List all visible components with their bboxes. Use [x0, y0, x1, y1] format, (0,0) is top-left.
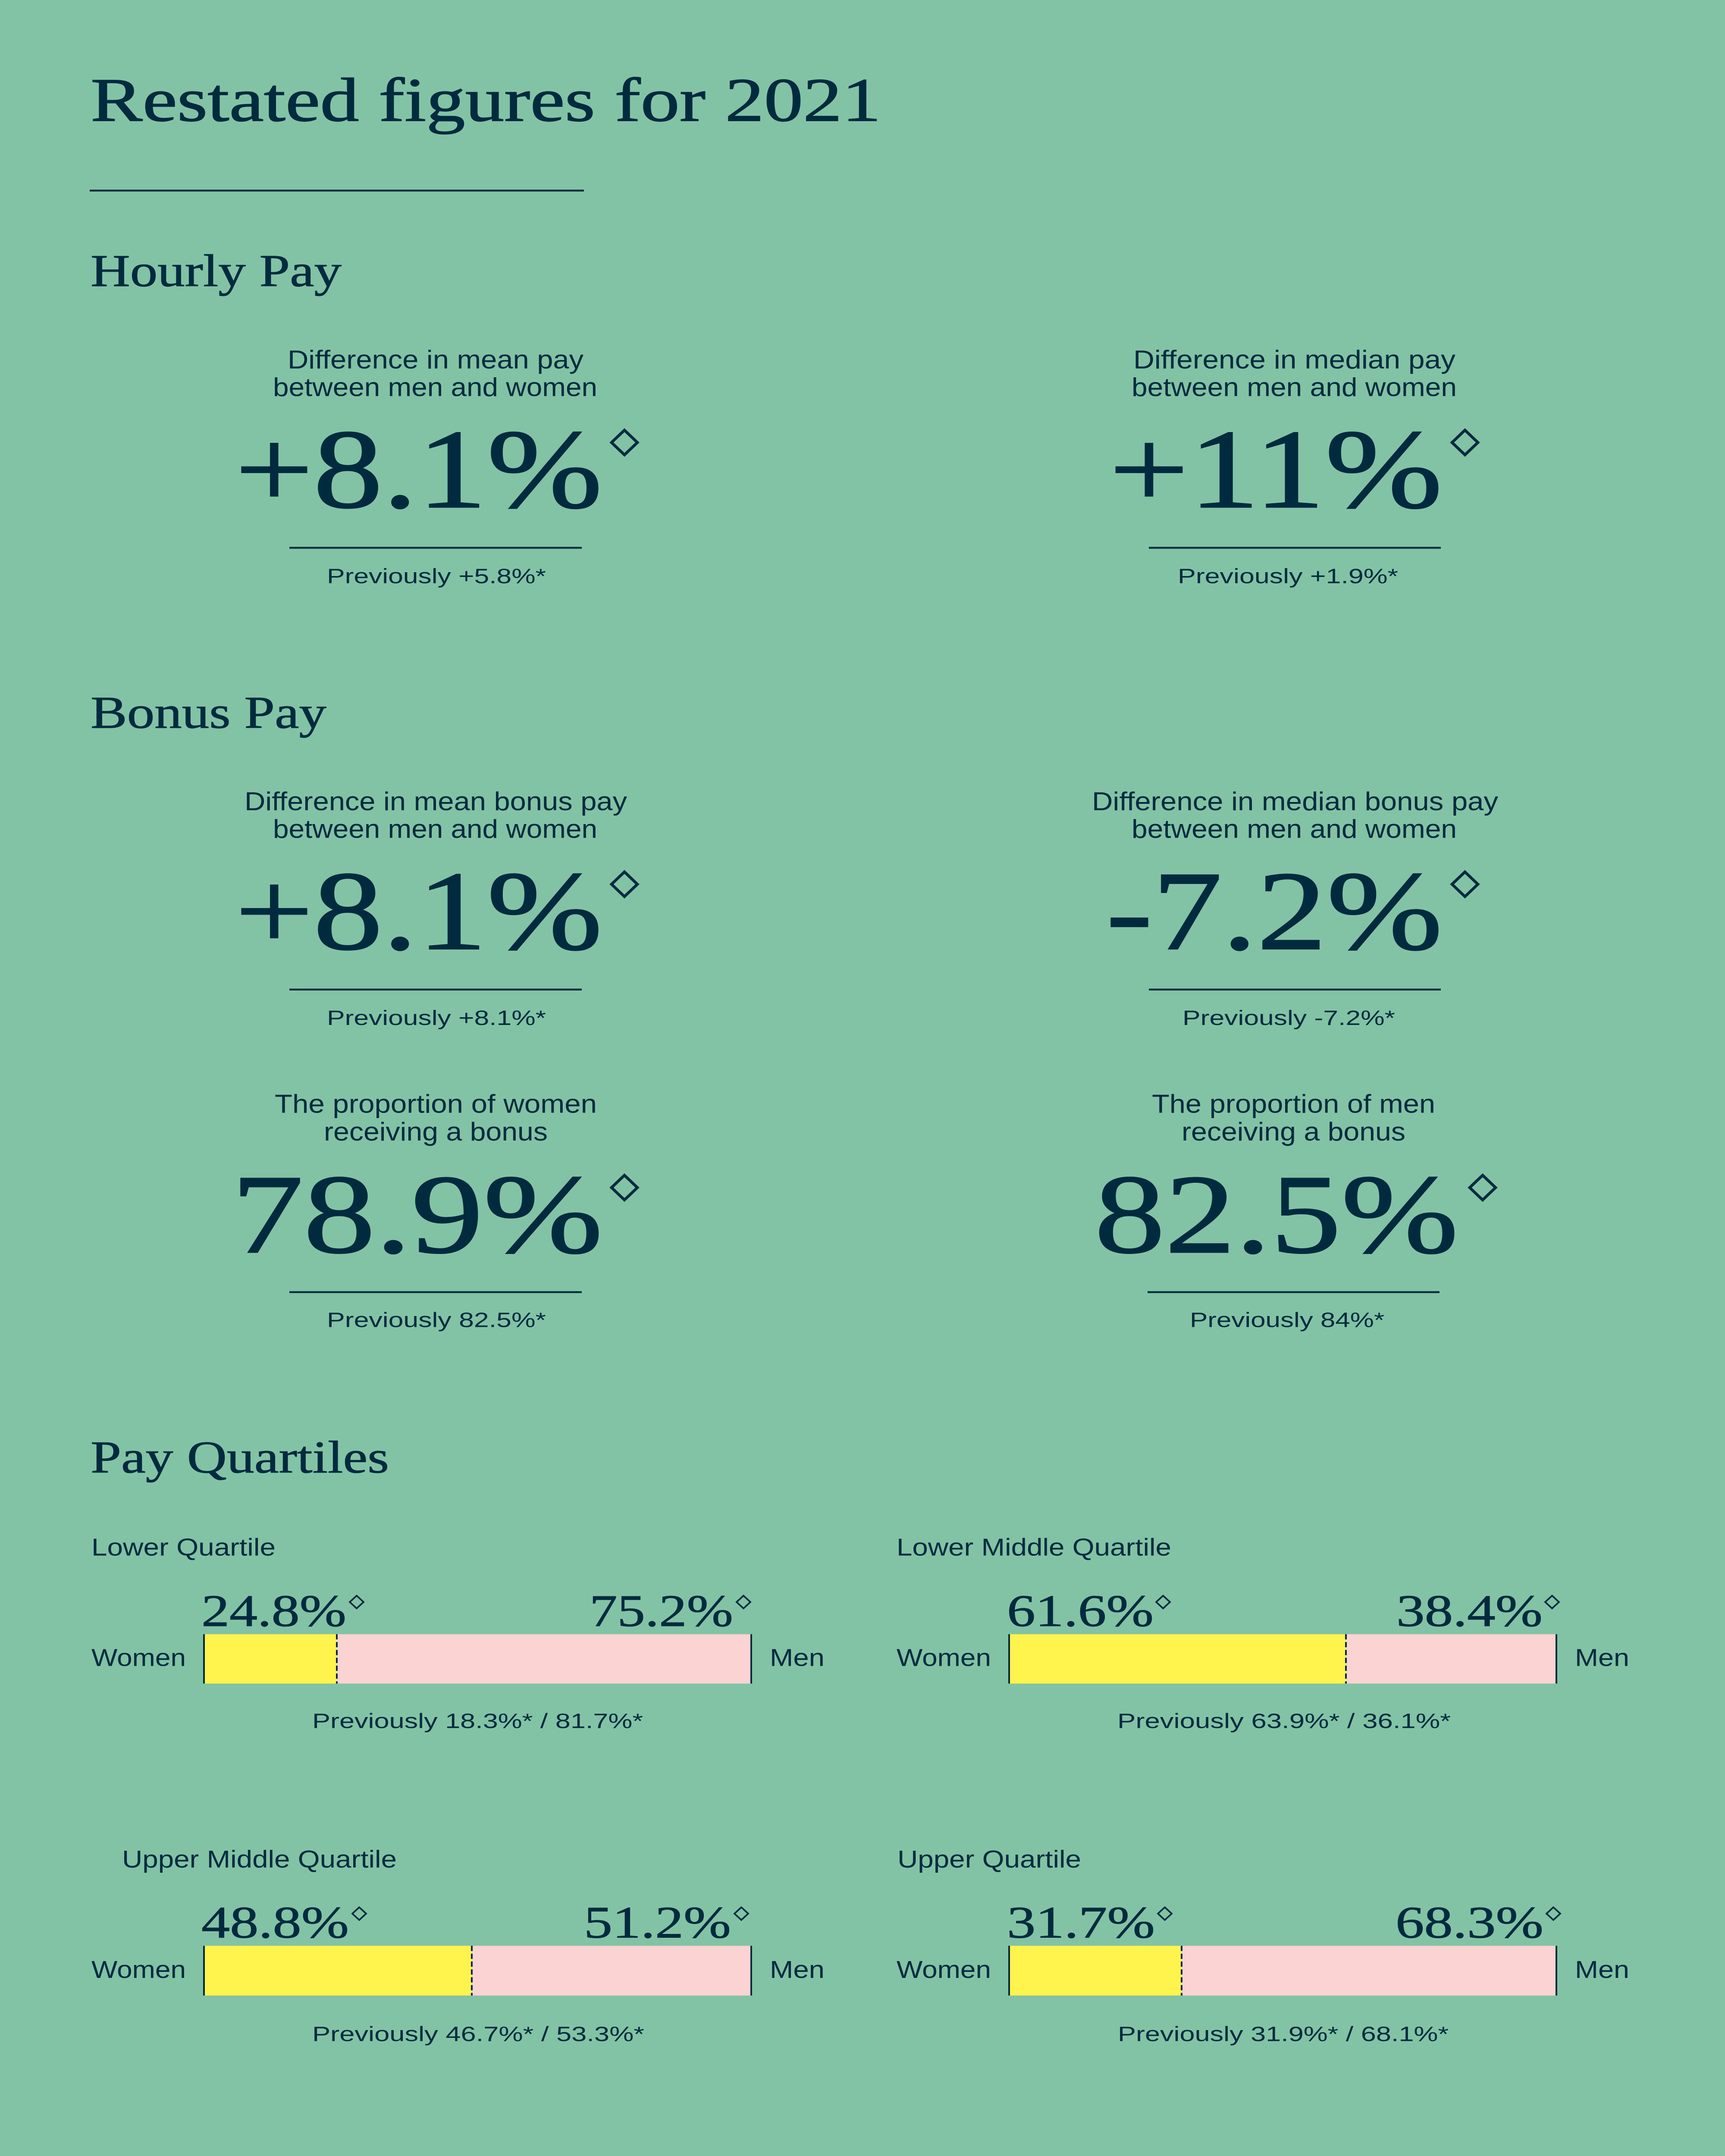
panel: difference in median bonus pay: [1092, 787, 1498, 1030]
panel: lower middle quartile: Previously 63.9%* / 36.1%*: [1117, 1710, 1451, 1733]
panel: proportion of women receiving a bonus: [232, 1089, 637, 1332]
panel: lower quartile: Lower Quartile: [91, 1534, 276, 1561]
panel: upper middle quartile: 51.2%: [584, 1898, 731, 1948]
panel: difference in median pay: between men and women: [1132, 373, 1457, 402]
panel: lower middle quartile: 38.4%: [1396, 1586, 1543, 1636]
panel: difference in mean pay: between men and women: [273, 373, 597, 402]
panel: proportion of women receiving a bonus: Previously 82.5%*: [327, 1309, 546, 1332]
panel: difference in median bonus pay: Previously -7.2%*: [1182, 1006, 1395, 1030]
panel: proportion of men receiving a bonus: Previously 84%*: [1190, 1309, 1384, 1332]
panel: difference in mean bonus pay: Previously +8.1%*: [327, 1006, 546, 1030]
panel: difference in mean pay: Difference in mean pay: [288, 345, 583, 374]
stacked bar: 24.8% women, 75.2% men: [204, 1634, 751, 1683]
panel: difference in median bonus pay: Difference in median bonus pay: [1092, 787, 1498, 816]
panel: lower quartile: Men: [770, 1644, 825, 1671]
stacked bar: 48.8% women, 51.2% men: [204, 1946, 751, 1996]
panel: difference in mean bonus pay: [235, 787, 637, 1030]
panel: lower quartile: 24.8%: [201, 1586, 346, 1636]
panel: upper quartile: 68.3%: [1396, 1898, 1543, 1948]
panel: upper quartile: Men: [1575, 1956, 1629, 1983]
panel: lower quartile: 75.2%: [590, 1586, 733, 1636]
panel: difference in mean bonus pay: +8.1%: [235, 849, 602, 974]
heading: Bonus Pay: Bonus Pay: [91, 687, 326, 738]
panel: proportion of women receiving a bonus: receiving a bonus: [324, 1117, 548, 1146]
panel: difference in mean bonus pay: Difference in mean bonus pay: [245, 787, 627, 816]
panel: difference in median bonus pay: -7.2%: [1106, 849, 1443, 974]
panel: proportion of women receiving a bonus: The proportion of women: [275, 1089, 597, 1119]
panel: proportion of women receiving a bonus: 78.9%: [232, 1152, 603, 1277]
panel: upper middle quartile: Upper Middle Quartile: [122, 1846, 397, 1873]
panel: difference in median bonus pay: between men and women: [1132, 814, 1457, 843]
panel: lower middle quartile: Women: [897, 1644, 991, 1671]
panel: lower middle quartile: Men: [1575, 1644, 1629, 1671]
panel: upper quartile: Women: [897, 1956, 991, 1983]
panel: upper middle quartile: [91, 1846, 825, 2046]
panel: lower quartile: Women: [91, 1644, 186, 1671]
panel: proportion of men receiving a bonus: The proportion of men: [1152, 1089, 1435, 1119]
panel: difference in mean pay: Previously +5.8%*: [327, 565, 546, 588]
panel: lower middle quartile: Lower Middle Quartile: [897, 1534, 1171, 1561]
panel: lower middle quartile: 61.6%: [1007, 1586, 1154, 1636]
panel: proportion of men receiving a bonus: 82.5%: [1095, 1152, 1458, 1277]
panel: upper middle quartile: Women: [91, 1956, 186, 1983]
panel: difference in mean pay: +8.1%: [235, 407, 602, 532]
stacked bar: 61.6% women, 38.4% men: [1009, 1634, 1556, 1683]
panel: difference in median pay: Difference in median pay: [1133, 345, 1455, 374]
panel: upper middle quartile: Men: [770, 1956, 825, 1983]
panel: upper quartile: Previously 31.9%* / 68.1%*: [1118, 2023, 1449, 2046]
panel: proportion of men receiving a bonus: [1095, 1089, 1496, 1332]
panel: upper quartile: Upper Quartile: [897, 1846, 1081, 1873]
panel: difference in median pay: +11%: [1109, 407, 1443, 532]
panel: lower middle quartile: [897, 1534, 1629, 1733]
panel: upper middle quartile: 48.8%: [201, 1898, 349, 1948]
panel: upper quartile: 31.7%: [1007, 1898, 1155, 1948]
panel: lower quartile: [91, 1534, 825, 1733]
panel: upper quartile: [897, 1846, 1629, 2046]
panel: lower quartile: Previously 18.3%* / 81.7%*: [312, 1710, 643, 1733]
heading: Pay Quartiles: Pay Quartiles: [91, 1432, 389, 1482]
panel: difference in median pay: [1109, 345, 1478, 588]
stacked bar: 31.7% women, 68.3% men: [1009, 1946, 1556, 1996]
panel: proportion of men receiving a bonus: receiving a bonus: [1182, 1117, 1405, 1146]
title: Restated figures for 2021: [91, 66, 881, 135]
panel: difference in median pay: Previously +1.9%*: [1178, 565, 1398, 588]
heading: Hourly Pay: Hourly Pay: [91, 245, 342, 296]
panel: difference in mean pay: [235, 345, 637, 588]
panel: upper middle quartile: Previously 46.7%* / 53.3%*: [312, 2023, 644, 2046]
panel: difference in mean bonus pay: between men and women: [273, 814, 597, 843]
